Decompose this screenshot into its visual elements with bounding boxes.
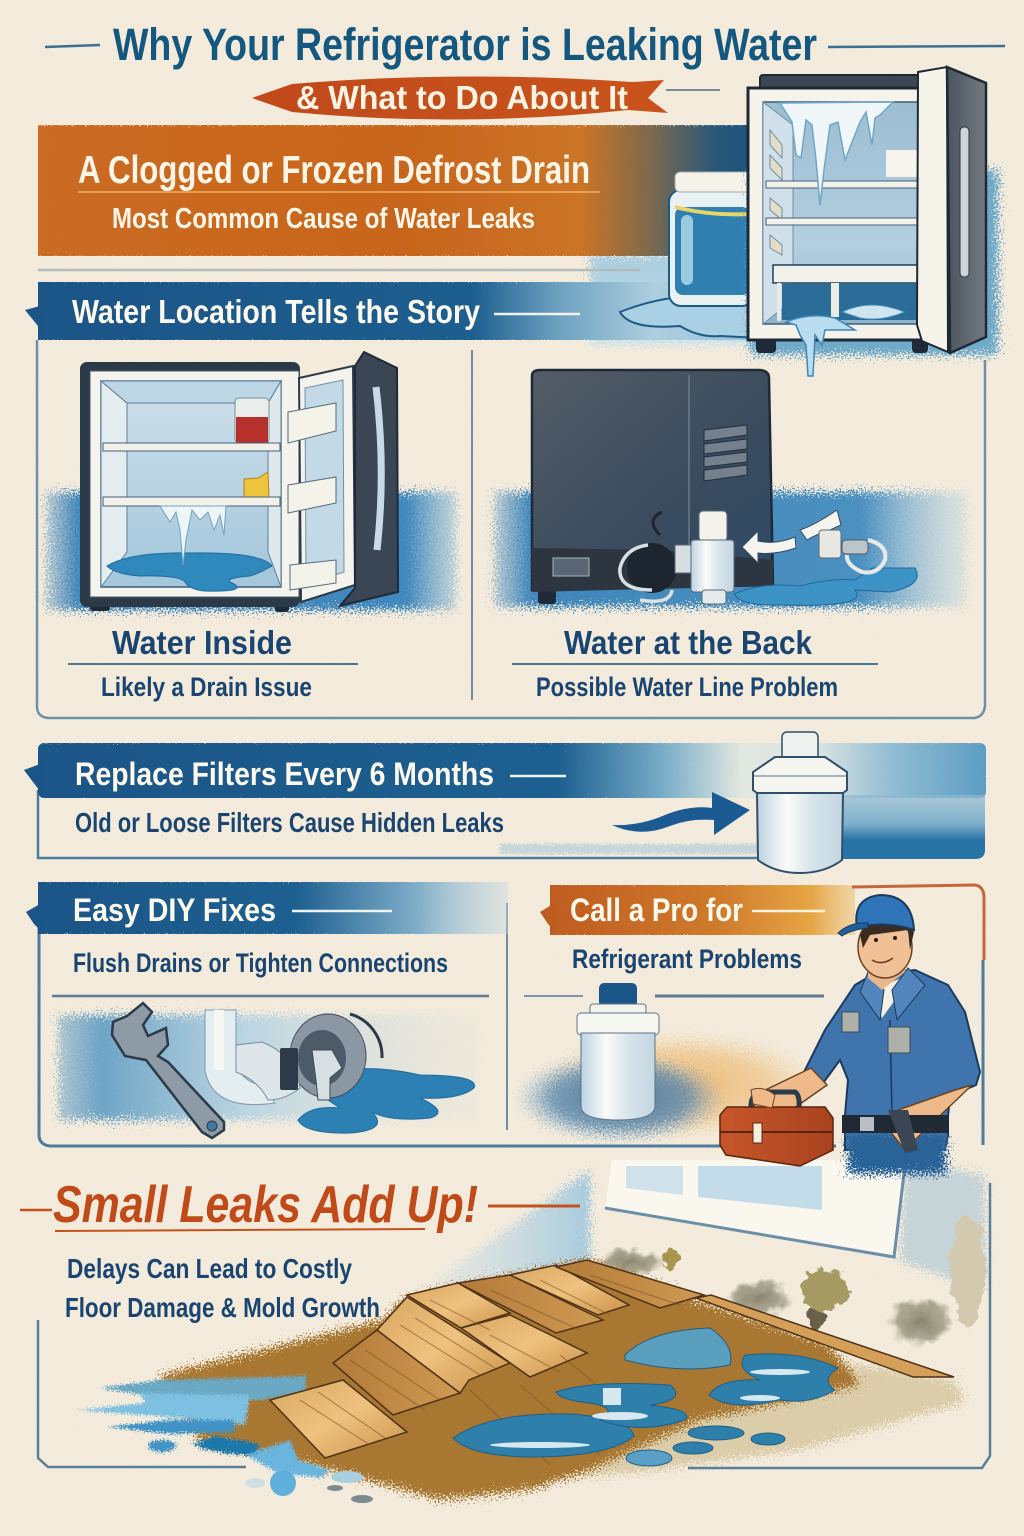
water line arrow	[742, 531, 796, 563]
fridge door open	[299, 366, 355, 602]
divider	[506, 903, 508, 1130]
text: delays: Delays Can Lead to Costly	[67, 1253, 352, 1284]
label: water inside: Water Inside	[112, 624, 292, 661]
label: water at the back: Water at the Back	[564, 624, 813, 661]
text: refrigerant problems: Refrigerant Problems	[572, 944, 802, 974]
banner: call a pro: Call a Pro for	[570, 892, 743, 928]
window	[605, 1160, 905, 1257]
text: delays	[65, 1253, 380, 1323]
banner subheading: Most Common Cause of Water Leaks	[112, 203, 535, 235]
blue streaks	[77, 1376, 330, 1478]
illustration: wrench and pipe	[58, 1003, 478, 1138]
cap	[856, 895, 914, 930]
banner: easy DIY	[26, 880, 512, 936]
subtitle ribbon	[252, 76, 720, 120]
icon: water filter	[753, 732, 847, 873]
frame corner: pro panel	[852, 885, 984, 960]
collar and undershirt	[868, 975, 908, 1018]
fridge door	[917, 67, 948, 352]
floor planks	[270, 1260, 954, 1458]
banner heading: A Clogged or Frozen Defrost Drain	[78, 149, 590, 192]
arms	[752, 1068, 827, 1118]
label: water at the back	[512, 624, 878, 702]
panel: replace filters: Old or Loose Filters Cause Hidden Leaks	[75, 807, 504, 838]
panel: diy and pro frame	[39, 925, 983, 1146]
neck and face	[868, 945, 905, 990]
icon: water jar	[620, 172, 760, 338]
divider	[471, 350, 473, 700]
illustration: technician	[720, 895, 980, 1174]
rule	[38, 269, 640, 271]
mold patches	[594, 1215, 986, 1346]
panel: replace filters	[24, 741, 990, 859]
rule	[52, 995, 489, 997]
text: delays: Floor Damage & Mold Growth	[65, 1292, 380, 1323]
floor base	[520, 1330, 965, 1482]
banner: easy DIY: Easy DIY Fixes	[73, 892, 276, 928]
label: water inside: Likely a Drain Issue	[101, 672, 312, 702]
pockets	[842, 1012, 859, 1032]
illustration: water at the back	[494, 370, 966, 607]
banner: call a pro	[540, 883, 858, 937]
arrow: toward filter	[612, 792, 750, 835]
label: water inside	[68, 624, 358, 702]
panel: water location frame	[37, 340, 985, 718]
text: flush drains: Flush Drains or Tighten Connections	[73, 948, 448, 978]
frame: bottom panel	[38, 1183, 990, 1468]
icon: frozen fridge with icicles	[748, 67, 998, 376]
wall shading	[395, 1170, 590, 1310]
belt	[842, 1115, 949, 1133]
banner: water location: Water Location Tells the Story	[72, 293, 481, 330]
panel: replace filters: Replace Filters Every 6 Months	[75, 756, 494, 792]
illustration: damaged floor and wall	[77, 1160, 986, 1503]
illustration: filter with splash	[515, 983, 825, 1143]
subtitle ribbon: & What to Do About It	[296, 79, 628, 116]
illustration: water inside fridge	[46, 352, 456, 612]
puddles	[453, 1328, 838, 1466]
wrench	[112, 1003, 224, 1138]
wood grain	[300, 1275, 680, 1465]
title: Why Your Refrigerator is Leaking Water	[113, 19, 817, 70]
banner: water location	[25, 280, 764, 342]
banner: clogged defrost drain	[34, 124, 774, 345]
water filter	[699, 511, 727, 541]
heading: small leaks add up: Small Leaks Add Up!	[53, 1176, 478, 1234]
toolbox	[751, 1092, 799, 1108]
label: water at the back: Possible Water Line Problem	[536, 672, 838, 702]
